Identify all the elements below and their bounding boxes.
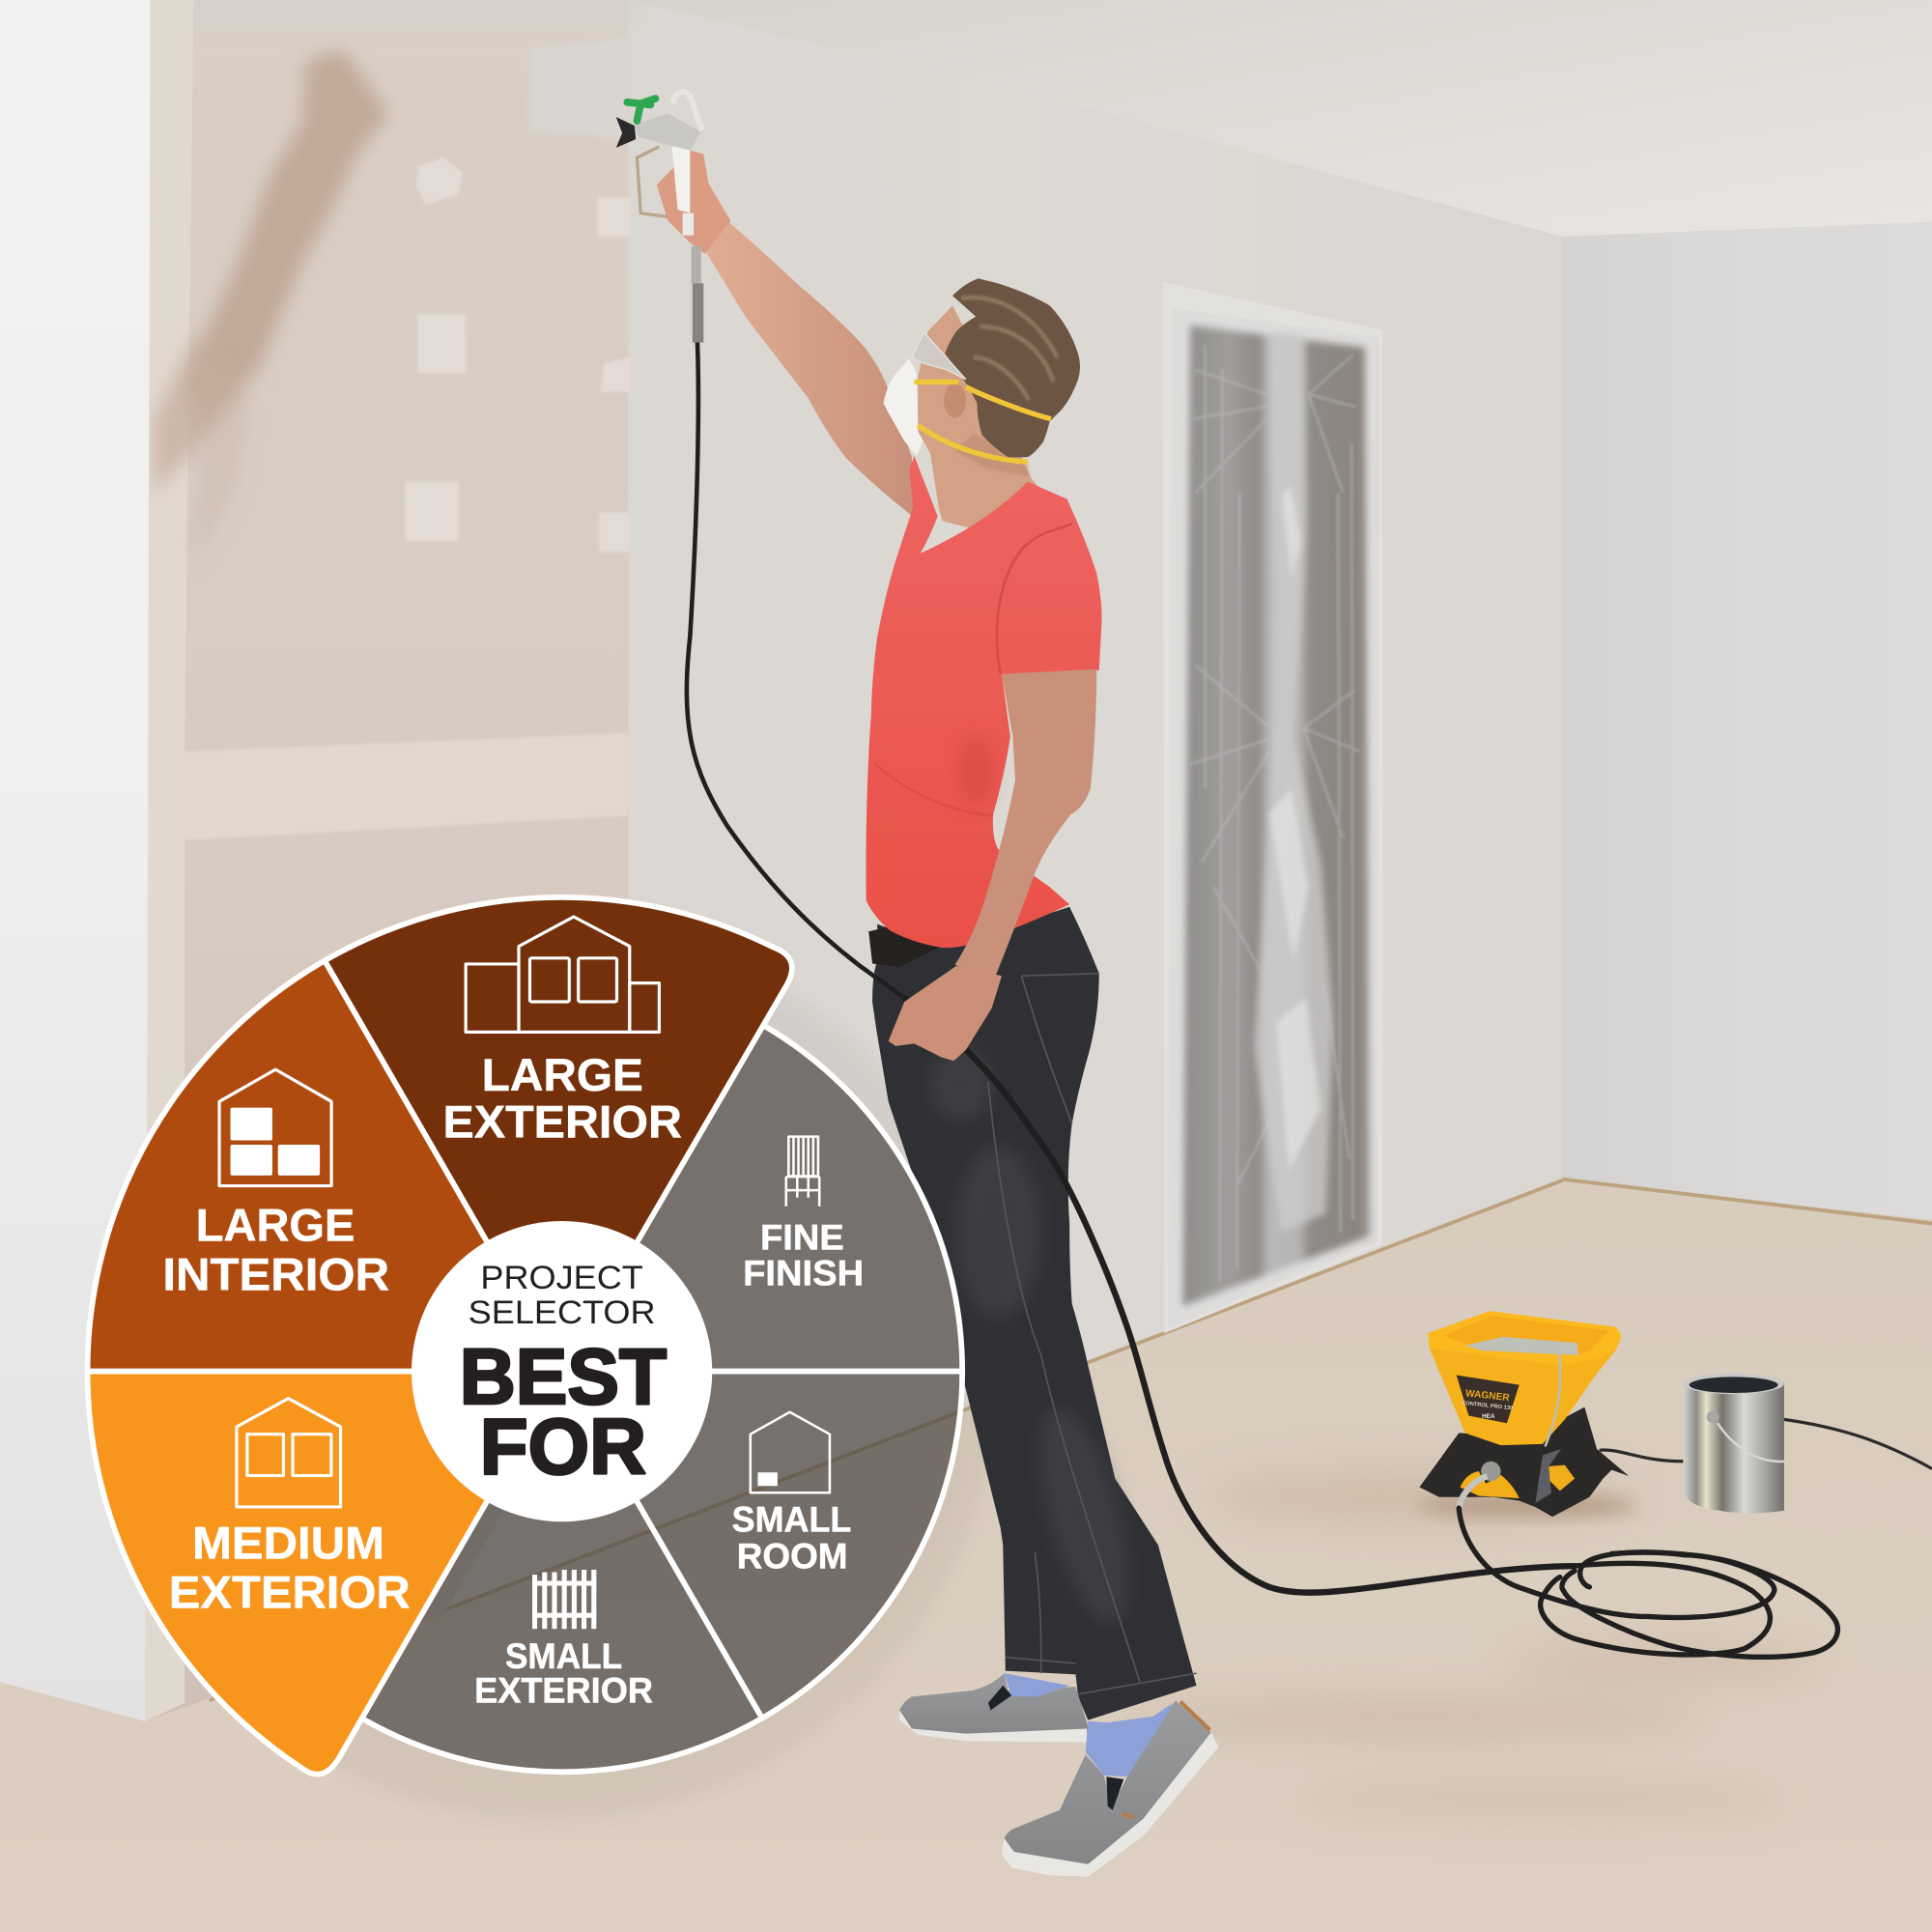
- can opening: [1683, 1374, 1784, 1394]
- neck shadow: [955, 434, 1030, 477]
- segment: large interior: [88, 960, 562, 1372]
- upper wall fade: [185, 0, 640, 25]
- trigger guard: [637, 147, 668, 216]
- sweat shadow: [958, 735, 993, 805]
- segment: fine finish: [562, 1025, 962, 1372]
- drywall patches: [406, 157, 631, 552]
- base grey inset: [1535, 1449, 1561, 1503]
- jeans: [872, 907, 1197, 1720]
- hopper body: [1430, 1348, 1616, 1445]
- wheel backdrop: room seen through wheel: [917, 1192, 960, 1364]
- gun handle: [671, 143, 690, 213]
- badge heading: BEST: [460, 1333, 667, 1421]
- gun hook: [672, 92, 702, 130]
- icon: small house: [751, 1412, 830, 1492]
- label: medium exterior: EXTERIOR: [169, 1568, 411, 1619]
- label: small exterior: SMALL: [505, 1636, 622, 1676]
- label: small room: ROOM: [737, 1537, 848, 1577]
- icon: medium house: [237, 1399, 341, 1507]
- label: large interior: INTERIOR: [162, 1249, 389, 1300]
- ceiling: [629, 0, 1932, 237]
- front sock: [1086, 1703, 1173, 1776]
- icon: large exterior house: [466, 917, 659, 1032]
- rear shoe elastic: [988, 1686, 1011, 1710]
- sprayed wall corner: [529, 37, 631, 139]
- front sole: [1002, 1732, 1218, 1877]
- upper hose run: [687, 343, 904, 998]
- badge subtitle: SELECTOR: [469, 1294, 656, 1331]
- brand name: CONTROL PRO 130: [1462, 1401, 1513, 1411]
- can paint: [1690, 1377, 1778, 1393]
- project selector wheel: [88, 897, 962, 1775]
- green tip guard: [627, 99, 656, 121]
- painter lower body: [868, 907, 1218, 1877]
- baseboard trim: [210, 1179, 1932, 1700]
- wheel shadow: [99, 922, 998, 1821]
- label: large exterior: [443, 1050, 682, 1148]
- hose swivel: [692, 246, 701, 283]
- black spray tip: [616, 117, 636, 148]
- can ear: [1707, 1410, 1719, 1423]
- raised arm: [705, 220, 914, 518]
- hose tube: [1459, 1476, 1488, 1508]
- brand name: WAGNER: [1464, 1388, 1511, 1404]
- label: large interior: [162, 1200, 389, 1300]
- painter upper body: [616, 92, 1102, 1061]
- neck and face: [918, 305, 1040, 529]
- hopper interior: [1444, 1316, 1609, 1355]
- label: small exterior: EXTERIOR: [474, 1671, 653, 1711]
- floor: [0, 1179, 1932, 1932]
- ear: [944, 384, 966, 417]
- badge circle: [412, 1221, 712, 1521]
- centre badge: [412, 1221, 712, 1521]
- paint sprayer: [1417, 1311, 1932, 1517]
- yellow intake: [1460, 1471, 1520, 1498]
- hair highlights: [961, 298, 1057, 401]
- label: medium exterior: [169, 1519, 411, 1619]
- segment: large exterior: [325, 897, 792, 1372]
- lower arm: [955, 669, 1096, 982]
- badge heading: FOR: [480, 1404, 646, 1492]
- shoe heel strip: [1122, 1701, 1210, 1817]
- label: fine finish: FINE: [760, 1217, 844, 1257]
- hose fitting: [683, 213, 694, 236]
- label: large exterior: EXTERIOR: [443, 1096, 682, 1148]
- rear shoe: [899, 1673, 1088, 1736]
- label: small exterior: [474, 1636, 653, 1711]
- label: fine finish: FINISH: [743, 1253, 864, 1293]
- gun body: [635, 113, 701, 151]
- front shoe elastic: [1106, 1776, 1123, 1810]
- goggles: [912, 332, 966, 380]
- corner bead strip: [146, 0, 193, 1721]
- bucket wire: [1534, 1347, 1560, 1446]
- paint surface: [1465, 1337, 1578, 1355]
- doorway covered in plastic: [1163, 282, 1382, 1333]
- respirator mask: [884, 358, 923, 456]
- plastic crumpled shine: [1269, 487, 1321, 1171]
- badge subtitle: [469, 1260, 656, 1331]
- plastic outer sheet: [1168, 308, 1380, 1328]
- rear sole: [899, 1710, 1087, 1743]
- left pillar: [0, 0, 151, 1721]
- hose fitting: [1481, 1462, 1501, 1481]
- label: large interior: LARGE: [196, 1200, 355, 1251]
- label: small room: [732, 1499, 851, 1577]
- raised hand: [657, 151, 730, 254]
- label: large exterior: LARGE: [482, 1050, 643, 1101]
- door frame: [1163, 282, 1382, 1333]
- badge heading: [460, 1333, 667, 1492]
- icon: chair: [786, 1137, 819, 1207]
- label: medium exterior: MEDIUM: [192, 1519, 384, 1570]
- plastic dark field: [1182, 326, 1370, 1306]
- paint can: [1683, 1374, 1785, 1513]
- drywall panel: [146, 0, 629, 1721]
- plastic streaks: [1190, 345, 1360, 1282]
- jeans lighter patches: [930, 1047, 1147, 1632]
- icon: large interior house: [219, 1069, 331, 1186]
- can body: [1685, 1382, 1784, 1513]
- spray hose: [687, 343, 1837, 1657]
- power cords: [1600, 1419, 1932, 1468]
- label: fine finish: [743, 1217, 864, 1293]
- plastic highlights: [1254, 332, 1333, 1233]
- wall tape strip: [183, 733, 629, 840]
- pump base: [1419, 1407, 1629, 1517]
- hair: [945, 278, 1080, 457]
- rear sock: [1005, 1673, 1069, 1696]
- brand name: HEA: [1482, 1413, 1495, 1420]
- belt: [868, 926, 941, 967]
- spray gun: [616, 92, 703, 343]
- hopper rim: [1428, 1311, 1622, 1365]
- label: small room: SMALL: [732, 1499, 851, 1539]
- lower hose run: [904, 998, 1575, 1593]
- segment: small exterior: [361, 1372, 762, 1772]
- right wall: [1562, 222, 1932, 1220]
- segment: small room: [562, 1372, 962, 1719]
- lower hand: [889, 966, 1002, 1061]
- brand label: [1457, 1375, 1520, 1423]
- badge subtitle: PROJECT: [480, 1260, 643, 1296]
- red t-shirt: [866, 456, 1102, 948]
- jeans seams: [988, 974, 1197, 1694]
- brand name: [1462, 1388, 1513, 1420]
- can handle: [1718, 1423, 1785, 1462]
- painter's shadow on wall: [154, 49, 389, 567]
- sleeve seam: [997, 524, 1072, 674]
- shirt crease: [875, 764, 993, 815]
- mask straps: [914, 382, 1051, 462]
- pump shadow: [1417, 1494, 1638, 1517]
- segment: medium exterior: [88, 1372, 562, 1775]
- icon: fence: [532, 1570, 596, 1629]
- floor shadows: [1122, 1470, 1824, 1814]
- hose spring: [693, 283, 703, 343]
- hose coil loops: [1459, 1508, 1837, 1657]
- yellow knob: [1548, 1465, 1575, 1491]
- front shoe: [1005, 1700, 1211, 1864]
